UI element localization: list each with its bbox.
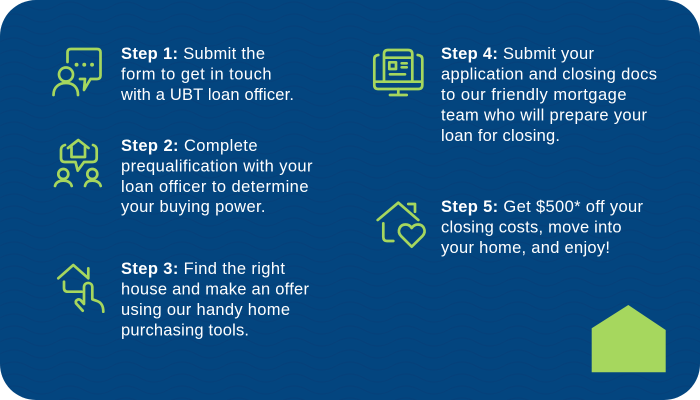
step 1 text: form to get in touch: [121, 66, 272, 84]
step 2 text: your buying power.: [121, 198, 266, 216]
step 3 text: house and make an offer: [121, 280, 310, 298]
step 2 text: [121, 137, 313, 216]
step 4 text: to our friendly mortgage: [441, 86, 626, 104]
step 1 text: with a UBT loan officer.: [120, 86, 294, 104]
step 3 text: Step 3: Find the right: [121, 260, 285, 278]
icon: house with heart: [378, 203, 425, 247]
step 3 text: [121, 260, 310, 340]
step 3 text: using our handy home: [121, 301, 290, 319]
step 5 text: your home, and enjoy!: [441, 239, 610, 257]
step 4 text: application and closing docs: [441, 66, 657, 84]
icon: house with pointing hand: [58, 265, 103, 312]
step 4 text: team who will prepare your: [441, 106, 648, 124]
house shape: [592, 305, 666, 372]
step 2 text: Step 2: Complete: [121, 137, 258, 155]
icon: house discussion between two people: [55, 140, 101, 186]
step 4 text: Step 4: Submit your: [441, 45, 594, 63]
icon: computer monitor with document: [374, 50, 422, 95]
step 1 text: Step 1: Submit the: [121, 45, 265, 63]
step 2 text: prequalification with your: [121, 158, 313, 176]
step 4 text: loan for closing.: [441, 127, 560, 145]
step 5 text: closing costs, move into: [441, 218, 622, 236]
step 2 text: loan officer to determine: [121, 178, 308, 196]
step 4 text: [441, 45, 657, 145]
step 3 text: purchasing tools.: [121, 322, 249, 340]
step 5 text: [441, 198, 644, 257]
icon: person with speech bubble: [54, 49, 100, 95]
step 5 text: Step 5: Get $500* off your: [441, 198, 644, 216]
step 1 text: [120, 45, 294, 104]
